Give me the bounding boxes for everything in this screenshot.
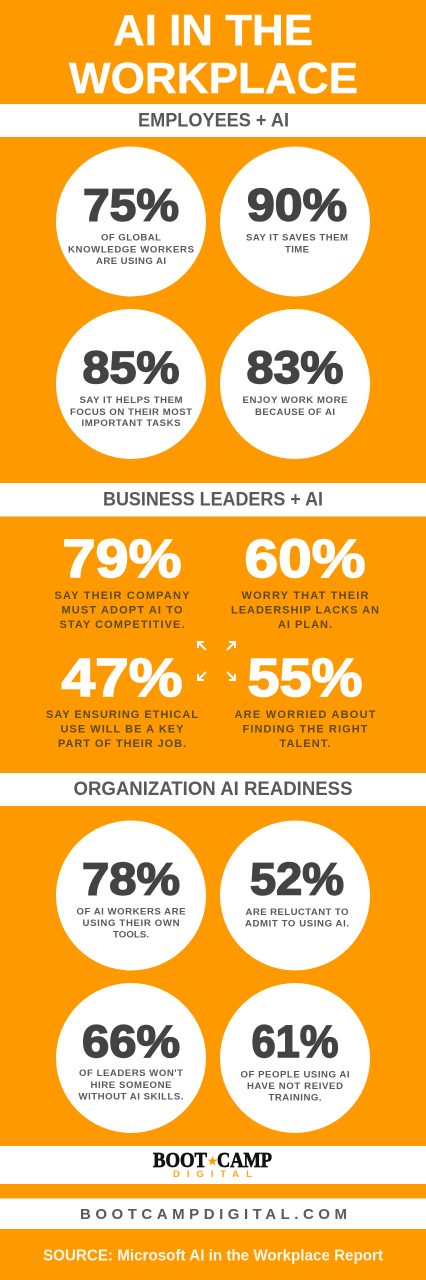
stat: 75%: KNOWLEDGE WORKERS bbox=[68, 244, 195, 256]
logo band: BOOT bbox=[153, 1148, 207, 1172]
panel: employees stats bbox=[56, 146, 370, 459]
stat: 61%: HAVE NOT REIVED bbox=[247, 1081, 343, 1092]
stat: 85%: IMPORTANT TASKS bbox=[82, 418, 181, 429]
stat: 60%: LEADERSHIP LACKS AN bbox=[231, 604, 379, 616]
icon: arrows bbox=[198, 642, 235, 680]
stat: 75%: 75% bbox=[83, 180, 179, 230]
panel: business leaders stats bbox=[46, 529, 379, 750]
stat: 78% bbox=[56, 820, 206, 970]
website band: BOOTCAMPDIGITAL.COM bbox=[80, 1206, 347, 1223]
stat: 60% bbox=[231, 529, 379, 631]
stat: 75%: OF GLOBAL bbox=[101, 232, 161, 244]
stat: 83%: 83% bbox=[246, 342, 344, 393]
stat: 90%: TIME bbox=[285, 244, 310, 256]
stat: 78%: USING THEIR OWN bbox=[82, 918, 180, 929]
stat: 61%: 61% bbox=[252, 1016, 338, 1067]
stat: 78%: OF AI WORKERS ARE bbox=[76, 906, 186, 918]
stat: 60%: 60% bbox=[244, 529, 366, 589]
stat: 60%: WORRY THAT THEIR bbox=[242, 590, 369, 602]
stat: 55% bbox=[234, 648, 376, 750]
stat: 47%: PART OF THEIR JOB. bbox=[58, 738, 186, 750]
stat: 79%: SAY THEIR COMPANY bbox=[54, 590, 190, 602]
website band bbox=[0, 1198, 426, 1229]
stat: 90%: 90% bbox=[247, 180, 347, 230]
stat: 66%: HIRE SOMEONE bbox=[90, 1080, 172, 1091]
stat: 55%: ARE WORRIED ABOUT bbox=[234, 709, 376, 721]
stat: 61% bbox=[220, 983, 370, 1133]
stat: 61%: OF PEOPLE USING AI bbox=[240, 1070, 350, 1080]
stat: 55%: TALENT. bbox=[280, 738, 330, 750]
stat: 66% bbox=[56, 983, 206, 1133]
stat: 79% bbox=[54, 529, 190, 631]
stat: 55%: 55% bbox=[248, 648, 362, 708]
stat: 79%: MUST ADOPT AI TO bbox=[62, 604, 183, 616]
panel: employees heading: EMPLOYEES + AI bbox=[138, 110, 289, 132]
stat: 66%: WITHOUT AI SKILLS. bbox=[78, 1092, 184, 1102]
stat: 60%: AI PLAN. bbox=[278, 619, 332, 631]
stat: 66%: 66% bbox=[82, 1016, 180, 1067]
stat: 79%: STAY COMPETITIVE. bbox=[60, 619, 184, 631]
stat: 75%: ARE USING AI bbox=[96, 256, 166, 267]
panel: business leaders heading: BUSINESS LEADERS + AI bbox=[103, 490, 323, 510]
stat: 83% bbox=[220, 309, 370, 459]
stat: 90% bbox=[220, 146, 370, 296]
stat: 78%: TOOLS. bbox=[113, 930, 149, 940]
stat: 47%: USE WILL BE A KEY bbox=[60, 724, 184, 736]
stat: 52%: ADMIT TO USING AI. bbox=[245, 918, 349, 930]
stat: 52%: ARE RELUCTANT TO bbox=[246, 907, 349, 918]
stat: 85%: SAY IT HELPS THEM bbox=[80, 395, 182, 406]
panel: organization readiness stats bbox=[56, 820, 370, 1133]
stat: 85%: 85% bbox=[82, 342, 180, 393]
stat: 47% bbox=[46, 648, 198, 750]
title: WORKPLACE bbox=[69, 54, 358, 103]
stat: 85% bbox=[56, 309, 206, 459]
stat: 78%: 78% bbox=[82, 854, 180, 904]
stat: 79%: 79% bbox=[62, 529, 182, 589]
panel: business leaders heading bbox=[0, 483, 426, 516]
panel: organization readiness heading: ORGANIZATION AI READINESS bbox=[74, 779, 352, 800]
stat: 47%: SAY ENSURING ETHICAL bbox=[46, 709, 198, 721]
stat: 55%: FINDING THE RIGHT bbox=[242, 724, 368, 736]
stat: 47%: 47% bbox=[62, 648, 182, 708]
stat: 52%: 52% bbox=[250, 854, 344, 904]
panel: employees heading bbox=[0, 104, 426, 137]
logo band bbox=[0, 1146, 426, 1184]
stat: 83%: ENJOY WORK MORE bbox=[242, 395, 348, 406]
stat: 52% bbox=[220, 820, 370, 970]
panel: organization readiness heading bbox=[0, 773, 426, 806]
stat: 85%: FOCUS ON THEIR MOST bbox=[70, 407, 192, 418]
source line: SOURCE: Microsoft AI in the Workplace Report bbox=[43, 1248, 383, 1264]
stat: 61%: TRAINING. bbox=[268, 1092, 322, 1104]
stat: 83%: BECAUSE OF AI bbox=[255, 407, 335, 418]
logo band: CAMP bbox=[217, 1148, 272, 1172]
stat: 75% bbox=[56, 146, 206, 296]
title: AI IN THE bbox=[113, 6, 313, 55]
stat: 66%: OF LEADERS WON'T bbox=[79, 1068, 183, 1079]
logo band: DIGITAL bbox=[173, 1169, 252, 1180]
stat: 90%: SAY IT SAVES THEM bbox=[246, 232, 348, 244]
title bbox=[69, 6, 358, 103]
